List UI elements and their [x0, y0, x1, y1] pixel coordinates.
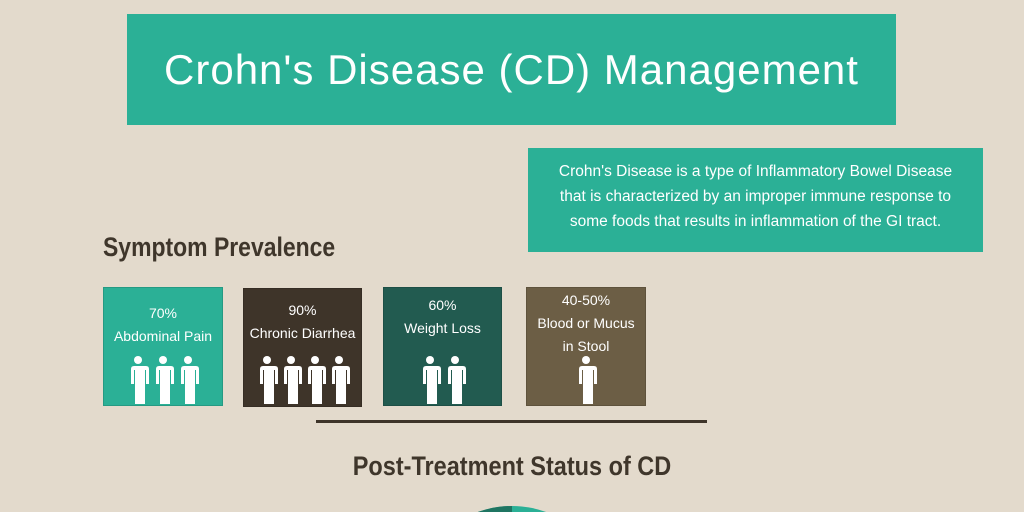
- heading: post-treatment: Post-Treatment Status of CD: [353, 451, 671, 481]
- card: chronic diarrhea: Chronic Diarrhea: [250, 325, 355, 341]
- heading: symptom prevalence: Symptom Prevalence: [103, 232, 335, 262]
- divider: [316, 420, 707, 423]
- card: blood or mucus: [526, 287, 646, 406]
- card: weight loss: Weight Loss: [404, 320, 481, 336]
- card: chronic diarrhea: 90%: [288, 302, 317, 318]
- card: chronic diarrhea: [243, 288, 362, 407]
- card: weight loss: 60%: [428, 297, 457, 313]
- title: Crohn's Disease (CD) Management: [164, 46, 859, 93]
- title: [127, 14, 896, 125]
- card: weight loss: [383, 287, 502, 406]
- card: abdominal pain: Abdominal Pain: [114, 328, 212, 344]
- card: abdominal pain: [103, 287, 223, 406]
- description box: Crohn's Disease is a type of Inflammatory Bowel Disease: [559, 163, 952, 180]
- card: abdominal pain: 70%: [149, 305, 177, 321]
- pie chart: [478, 506, 546, 512]
- card: blood or mucus: Blood or Mucus: [537, 315, 635, 331]
- description box: some foods that results in inflammation of the GI tract.: [570, 213, 941, 230]
- description box: [528, 148, 983, 252]
- card: blood or mucus: in Stool: [563, 338, 609, 354]
- description box: that is characterized by an improper immune response to: [560, 188, 951, 205]
- card: blood or mucus: 40-50%: [562, 292, 610, 308]
